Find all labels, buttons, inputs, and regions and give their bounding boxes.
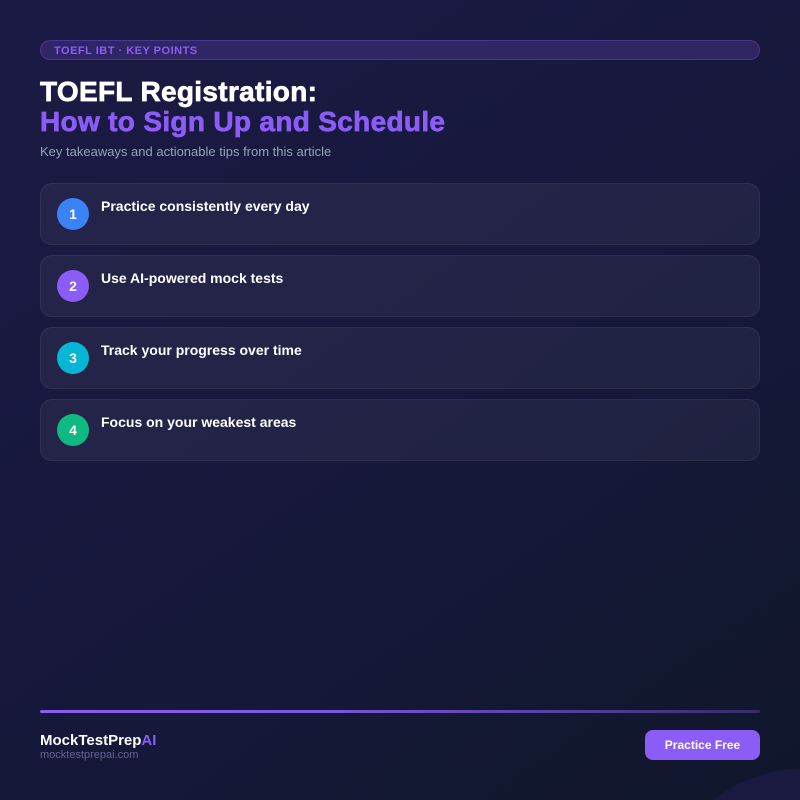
- text: key point 3: Track your progress over time: [101, 342, 302, 358]
- brand name: MockTestPrepAI: [40, 732, 156, 749]
- icon: number 2: 2: [69, 278, 77, 294]
- icon: number 3: 3: [69, 350, 77, 366]
- icon: number 4: 4: [69, 422, 77, 438]
- text: key point 4: Focus on your weakest areas: [101, 414, 296, 430]
- icon: number 4: [57, 414, 89, 446]
- brand url: mocktestprepai.com: [40, 749, 138, 761]
- footer gradient rule: [40, 710, 760, 713]
- decorative corner circle: [700, 768, 800, 800]
- panel: key point 3: [40, 327, 760, 389]
- title: How to Sign Up and Schedule: [40, 106, 445, 137]
- call to action button: Practice Free: [665, 738, 740, 752]
- badge: category label: TOEFL IBT · KEY POINTS: [54, 45, 198, 57]
- panel: key point 1: [40, 183, 760, 245]
- title: TOEFL Registration:: [40, 76, 317, 107]
- icon: number 2: [57, 270, 89, 302]
- call to action button: [645, 730, 760, 760]
- text: key point 2: Use AI-powered mock tests: [101, 270, 283, 286]
- icon: number 3: [57, 342, 89, 374]
- brand block: [40, 732, 156, 761]
- title: [40, 76, 445, 138]
- icon: number 1: 1: [69, 206, 77, 222]
- badge: category label: [40, 40, 760, 60]
- panel: key point 4: [40, 399, 760, 461]
- icon: number 1: [57, 198, 89, 230]
- text: key point 1: Practice consistently every day: [101, 198, 310, 214]
- subtitle: Key takeaways and actionable tips from this article: [40, 144, 331, 159]
- panel: key point 2: [40, 255, 760, 317]
